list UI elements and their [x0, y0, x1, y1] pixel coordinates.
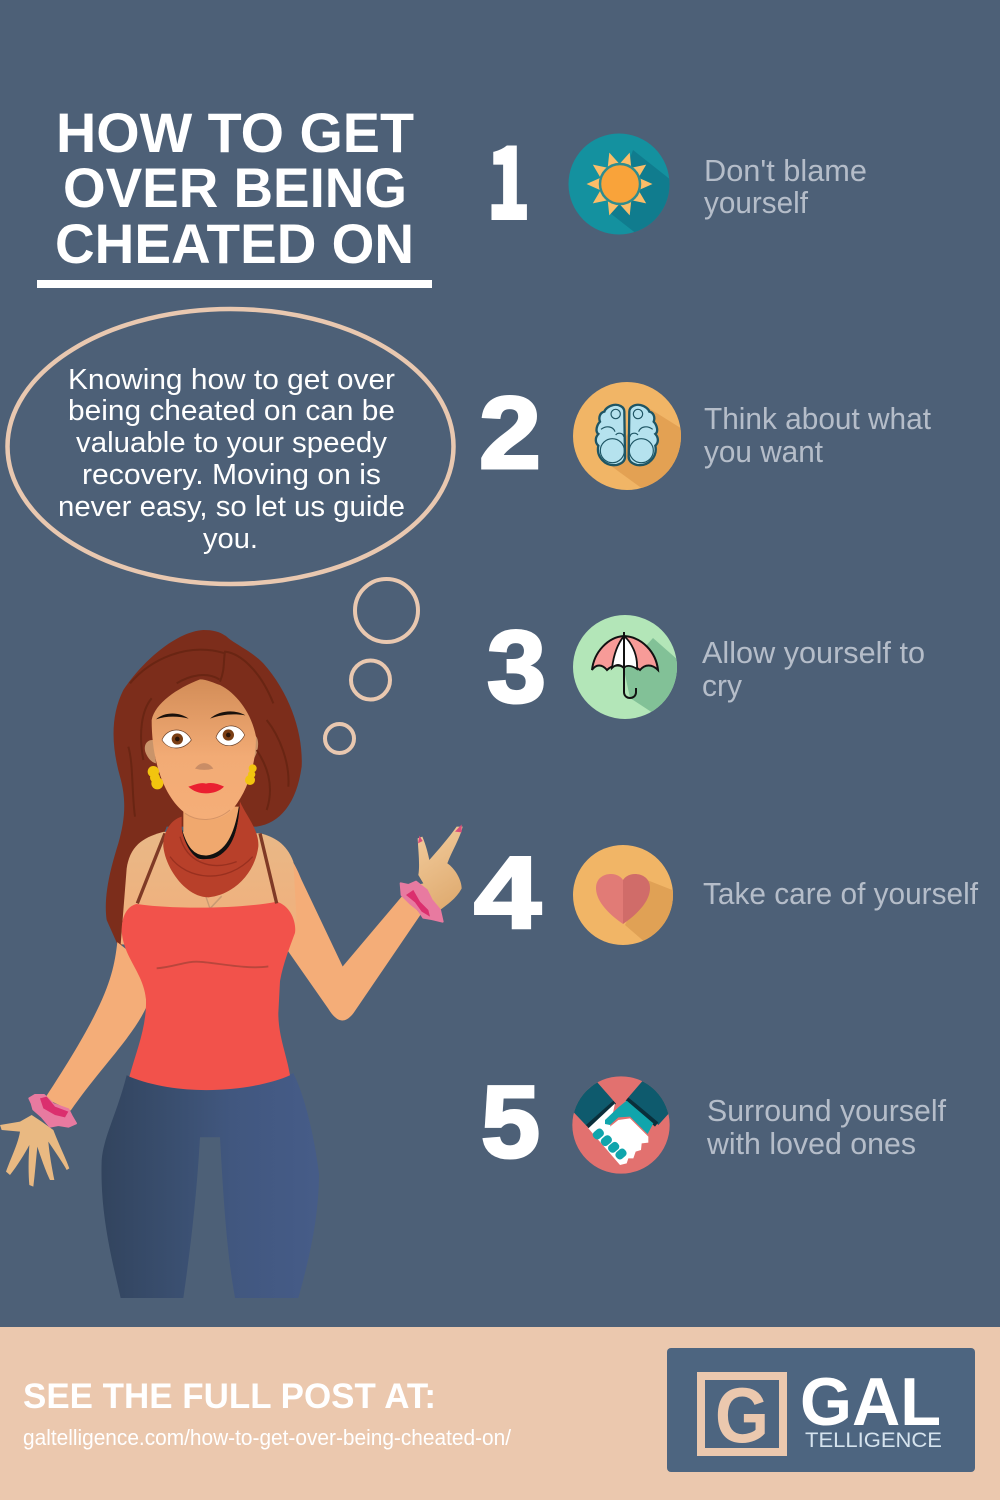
fist and pointing fingers — [417, 827, 463, 910]
earrings — [148, 764, 257, 789]
left arm — [45, 942, 147, 1111]
speech bubble: intro — [8, 309, 454, 584]
left hand — [0, 1095, 76, 1187]
label: don't blame yourself — [704, 153, 867, 220]
number 5: 5 — [481, 1065, 540, 1179]
number 1: 1 — [487, 105, 530, 247]
hair back — [106, 630, 302, 950]
icon: umbrella — [573, 615, 677, 719]
speech bubble: intro: Knowing how to get over — [68, 364, 395, 396]
number 2: 2 — [479, 376, 541, 490]
icon: heart — [573, 845, 673, 945]
speech bubble: intro: valuable to your speedy — [76, 427, 388, 459]
face — [152, 679, 256, 820]
red top — [122, 902, 295, 1090]
step 5 — [482, 1076, 946, 1174]
footer band — [0, 1327, 1000, 1500]
torso skin — [121, 832, 297, 949]
eyebrows — [156, 711, 245, 719]
speech bubble: intro: you. — [203, 523, 258, 555]
step 1 — [491, 134, 866, 234]
left scrunchie — [29, 1095, 76, 1127]
step 4 — [474, 845, 978, 945]
label: surround yourself with loved ones: Surround yourself — [707, 1093, 946, 1128]
black collar — [182, 807, 239, 859]
logo: TELLIGENCE — [805, 1429, 942, 1452]
top seam — [157, 962, 268, 968]
icon: sun — [568, 134, 670, 234]
number 4: 4 — [474, 836, 541, 950]
logo: GAL — [800, 1364, 941, 1440]
label: think about what you want: Think about what — [704, 401, 931, 436]
left eye — [162, 730, 191, 748]
label: allow yourself to cry — [702, 635, 925, 703]
head — [128, 650, 289, 903]
scarf — [163, 802, 258, 897]
icon: handshake — [568, 1076, 675, 1174]
jeans — [101, 1073, 319, 1298]
speech bubble: intro: recovery. Moving on is — [82, 459, 381, 491]
footer url: galtelligence.com/how-to-get-over-being-cheated-on/ — [23, 1425, 512, 1450]
ears — [145, 735, 258, 763]
label: think about what you want — [704, 401, 931, 469]
neck — [183, 807, 240, 860]
right eye — [216, 726, 245, 746]
footer heading: SEE THE FULL POST AT: — [23, 1377, 436, 1416]
body — [45, 832, 421, 1298]
label: surround yourself with loved ones — [706, 1093, 946, 1161]
title — [37, 101, 432, 288]
right scrunchie — [401, 882, 443, 922]
lips — [188, 783, 224, 793]
nose — [195, 763, 213, 770]
speech bubble: intro: being cheated on can be — [68, 395, 395, 427]
label: think about what you want: you want — [704, 434, 823, 469]
logo: G — [715, 1371, 769, 1459]
speech bubble: intro: never easy, so let us guide — [58, 491, 405, 523]
chin line — [185, 810, 230, 820]
title: OVER BEING — [63, 156, 407, 219]
number 3: 3 — [487, 610, 546, 724]
hair strands — [128, 650, 289, 817]
label: don't blame yourself: Don't blame — [704, 153, 867, 188]
label: take care of yourself: Take care of yourself — [703, 876, 978, 911]
title: HOW TO GET — [56, 101, 414, 164]
step 3 — [488, 615, 924, 719]
title: CHEATED ON — [55, 212, 414, 275]
right arm — [257, 834, 421, 1020]
label: don't blame yourself: yourself — [704, 185, 808, 220]
icon: brain — [573, 382, 681, 490]
step 2 — [481, 382, 931, 490]
necklace — [205, 894, 222, 924]
logo — [667, 1348, 975, 1472]
palm and fingers — [0, 1115, 69, 1187]
straps — [137, 833, 277, 903]
nails — [418, 824, 462, 843]
right hand — [401, 824, 463, 922]
label: allow yourself to cry: cry — [702, 668, 742, 703]
thought bubbles — [325, 579, 418, 753]
illustration: woman — [0, 630, 463, 1298]
label: allow yourself to cry: Allow yourself to — [702, 635, 925, 670]
label: surround yourself with loved ones: with loved ones — [706, 1126, 916, 1161]
scarf fold — [170, 837, 253, 876]
